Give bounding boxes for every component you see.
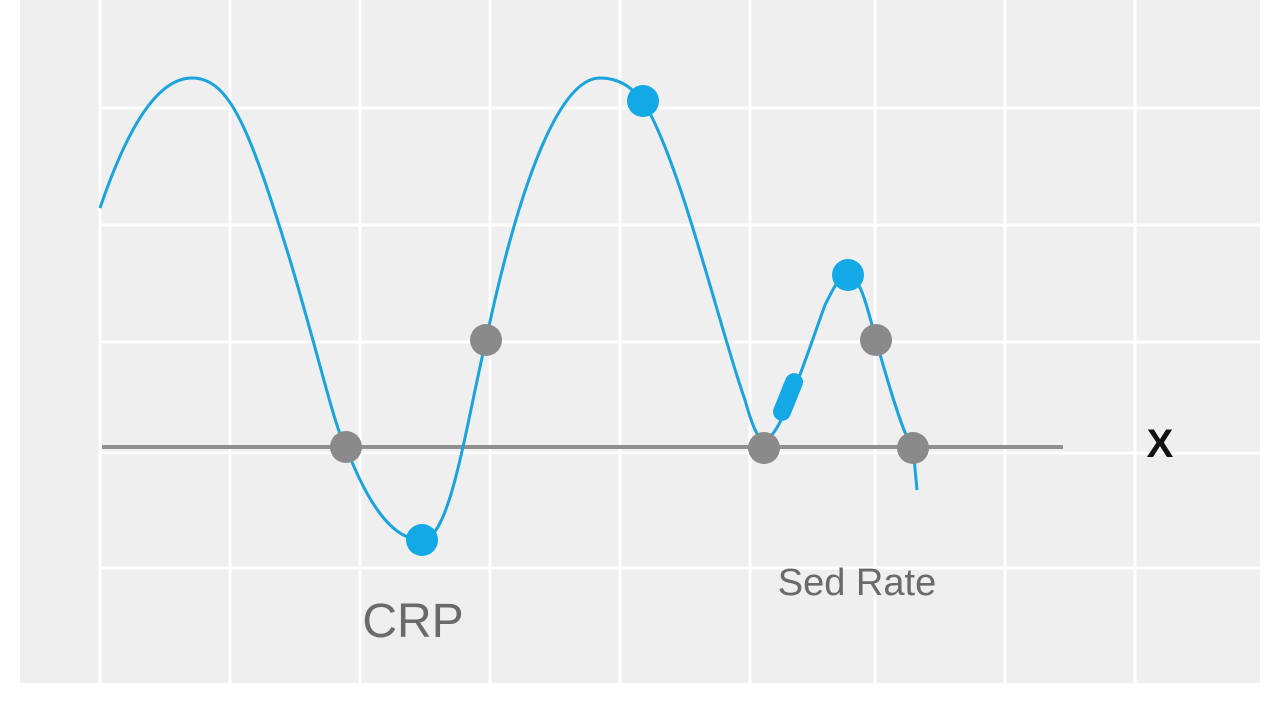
label: CRP: CRP [362, 595, 464, 648]
x axis line [102, 445, 1063, 449]
label: Sed Rate: Sed Rate [778, 562, 936, 604]
wave curve [100, 78, 917, 540]
label: X: X [1147, 422, 1174, 466]
gray markers [330, 324, 929, 464]
blue markers [406, 85, 864, 556]
